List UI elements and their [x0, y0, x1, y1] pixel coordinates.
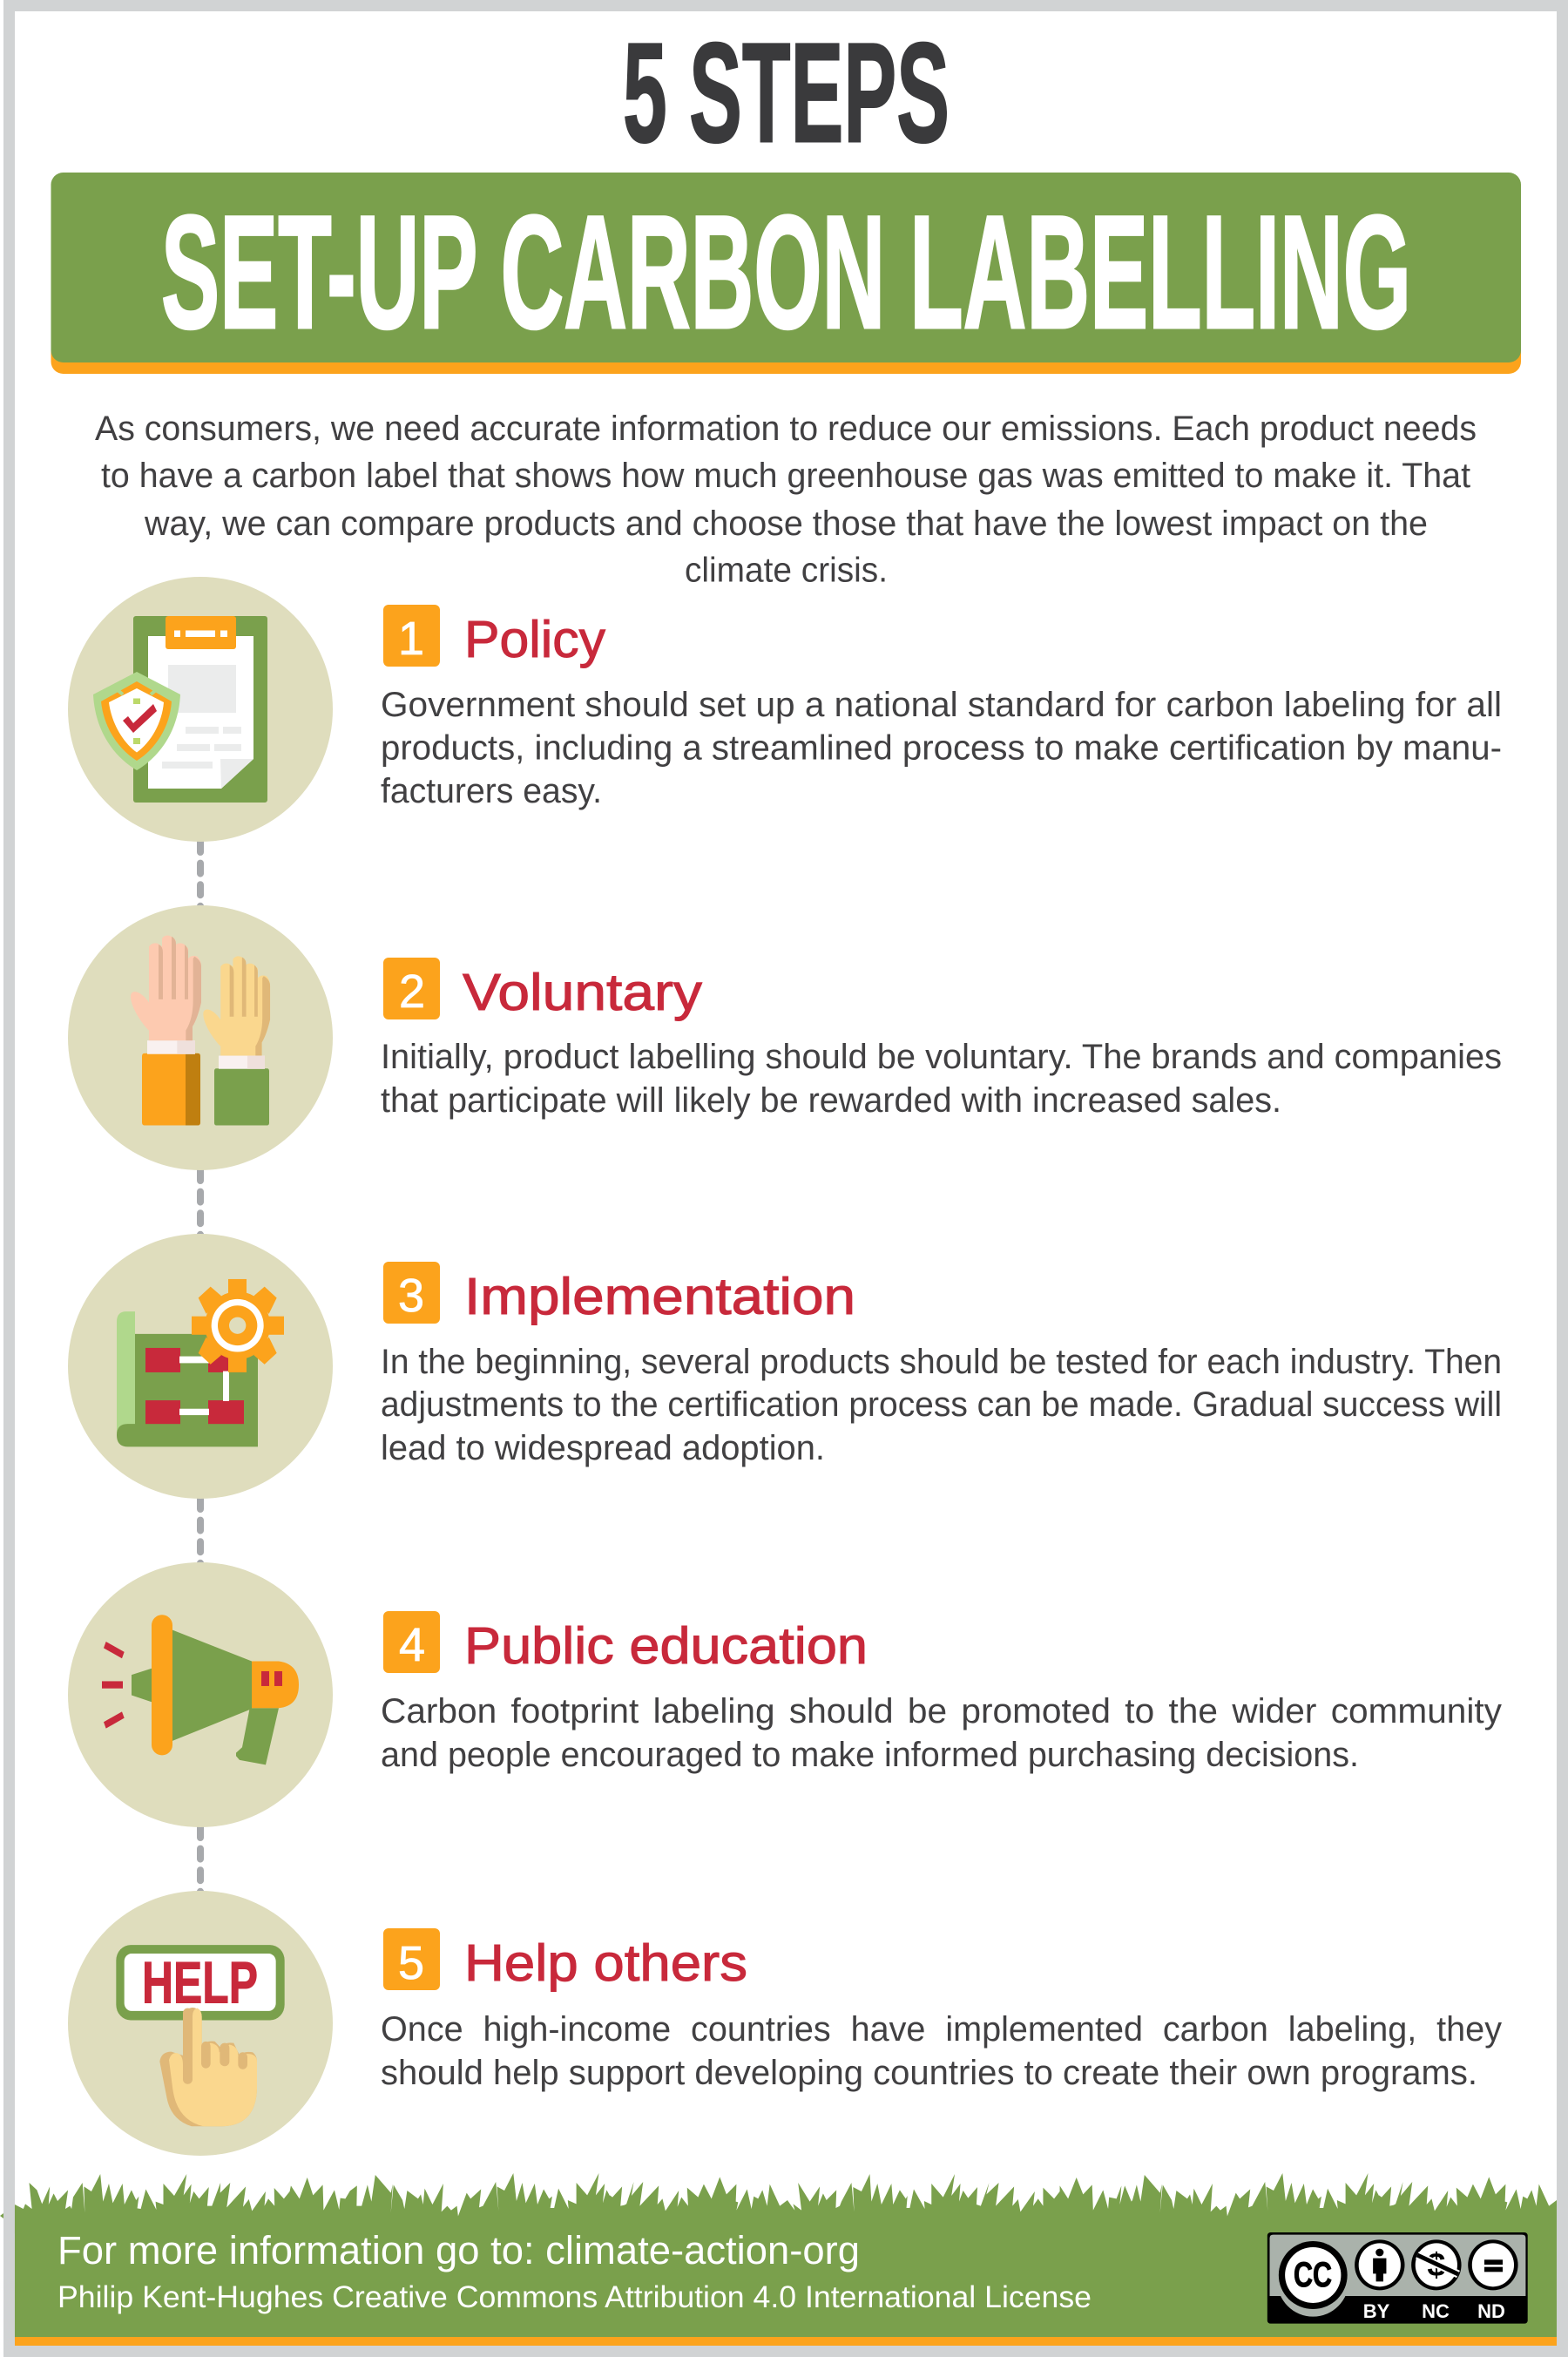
intro text: climate crisis. [685, 551, 888, 589]
number badge 5 [383, 1928, 440, 1990]
icon: megaphone [68, 1562, 333, 1827]
number badge 2 [383, 958, 440, 1019]
icon: clipboard with shield [68, 577, 333, 842]
step 2: voluntary [68, 905, 1502, 1170]
heading: voluntary: Voluntary [463, 964, 703, 1021]
icon: raised hands [68, 905, 333, 1170]
intro text: way, we can compare products and choose those that have the lowest impact on the [144, 505, 1428, 543]
body text: voluntary: Initially, product labelling should be voluntary. The brands and companies [381, 1038, 1502, 1076]
icon: creative commons badge: CC [1294, 2256, 1332, 2294]
body text: public education: Carbon footprint labeling should be promoted to the wider community [381, 1692, 1502, 1730]
number badge 3: 3 [398, 1270, 424, 1322]
number badge 3 [383, 1262, 440, 1324]
icon: creative commons badge: $ [1427, 2247, 1446, 2284]
body text: help others [381, 2010, 1502, 2092]
number badge 1: 1 [398, 613, 424, 665]
heading: implementation: Implementation [464, 1268, 855, 1325]
number badge 2: 2 [399, 965, 425, 1018]
icon: help button with pointing hand [68, 1891, 333, 2156]
body text: help others: should help support developing countries to create their own programs. [381, 2054, 1477, 2092]
body text: voluntary [381, 1038, 1502, 1120]
number badge 5: 5 [398, 1937, 424, 1989]
icon: creative commons badge [1267, 2232, 1528, 2324]
body text: policy [381, 686, 1502, 810]
body text: voluntary: that participate will likely be rewarded with increased sales. [381, 1081, 1281, 1120]
footer text: more information: For more information go to: climate-action-org [57, 2228, 860, 2272]
intro text: to have a carbon label that shows how much greenhouse gas was emitted to make it. That [101, 457, 1470, 495]
body text: public education: and people encouraged to make informed purchasing decisions. [381, 1736, 1359, 1774]
body text: policy: Government should set up a national standard for carbon labeling for all [381, 686, 1502, 724]
icon: creative commons badge: ND [1477, 2300, 1505, 2322]
icon: help button with pointing hand: HELP [142, 1950, 258, 2016]
icon: creative commons badge: BY [1363, 2300, 1390, 2322]
title: 5 steps: 5 STEPS [623, 12, 950, 173]
grass silhouette [0, 2173, 1568, 2233]
body text: policy: products, including a streamlined process to make certification by manu- [381, 728, 1502, 767]
body text: help others: Once high-income countries have implemented carbon labeling, they [381, 2010, 1502, 2049]
footer with grass [0, 2173, 1568, 2346]
step 3: implementation [68, 1234, 1502, 1499]
intro text: As consumers, we need accurate information to reduce our emissions. Each product needs [95, 410, 1477, 448]
intro text [95, 410, 1477, 589]
step 4: public education [68, 1562, 1502, 1827]
heading: public education: Public education [464, 1617, 868, 1675]
step 1: policy [68, 577, 1502, 842]
icon: blueprint with gear [68, 1234, 333, 1499]
footer text: license: Philip Kent-Hughes Creative Commons Attribution 4.0 International License [57, 2280, 1092, 2314]
body text: implementation: adjustments to the certification process can be made. Gradual success will [381, 1385, 1502, 1424]
number badge 4: 4 [399, 1619, 425, 1671]
body text: public education [381, 1692, 1502, 1774]
step 5: help others [68, 1891, 1502, 2156]
body text: implementation: In the beginning, several products should be tested for each industry. Then [381, 1343, 1502, 1381]
icon: creative commons badge: NC [1422, 2300, 1450, 2322]
body text: implementation [381, 1343, 1502, 1467]
body text: implementation: lead to widespread adoption. [381, 1429, 825, 1467]
heading: help others: Help others [464, 1934, 747, 1992]
heading: policy: Policy [464, 611, 606, 668]
number badge 1 [383, 605, 440, 667]
number badge 4 [383, 1611, 440, 1673]
body text: policy: facturers easy. [381, 772, 602, 810]
